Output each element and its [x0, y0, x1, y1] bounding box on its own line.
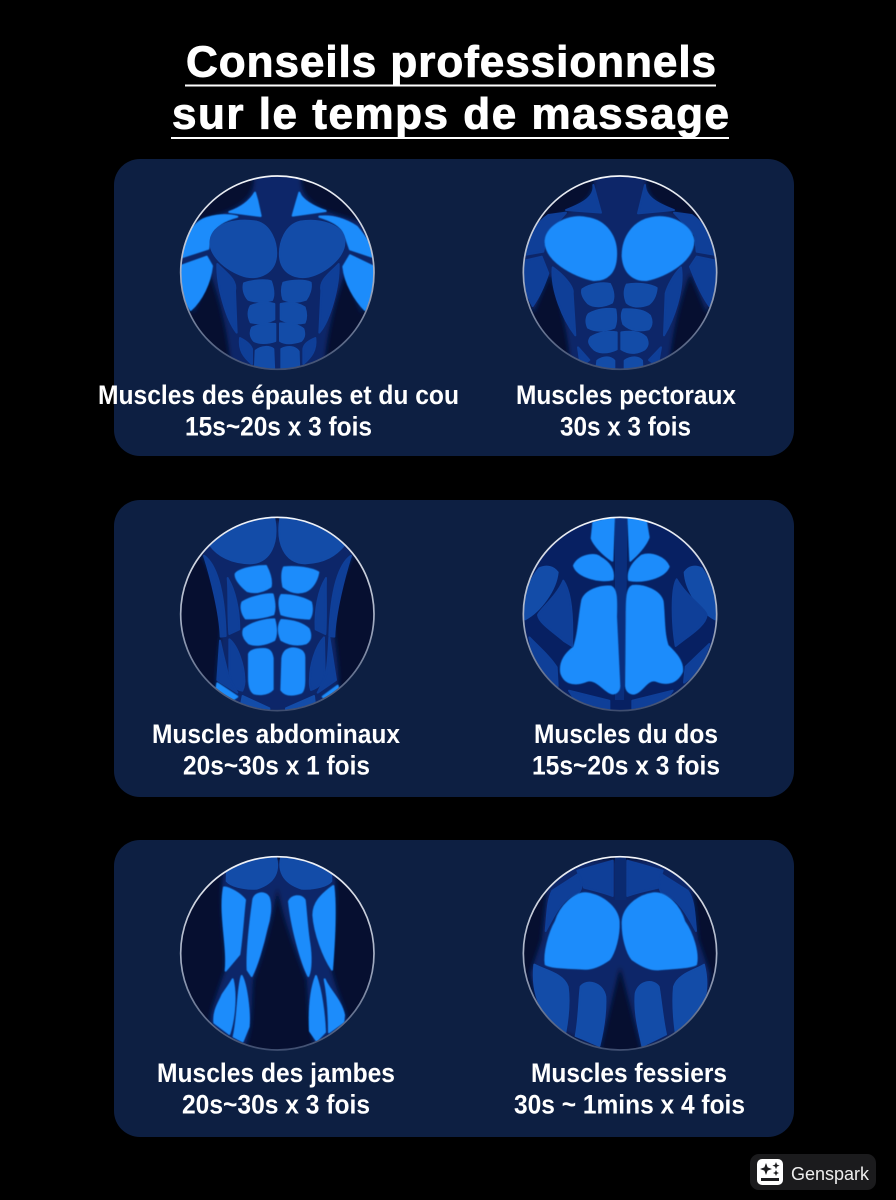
label: pectoral muscles: 30s x 3 fois — [560, 412, 691, 442]
label: leg muscles: Muscles des jambes — [157, 1058, 395, 1088]
icon: Genspark logo — [757, 1159, 783, 1185]
icon: shoulder and neck muscles — [177, 173, 378, 373]
label: pectoral muscles — [516, 380, 736, 442]
label: back muscles — [532, 719, 720, 780]
title — [171, 38, 729, 139]
panel: abdominals and back — [114, 500, 794, 797]
title: sur le temps de massage — [172, 90, 729, 138]
icon: leg muscles — [181, 857, 374, 1050]
label: back muscles: 15s~20s x 3 fois — [532, 750, 720, 780]
label: leg muscles: 20s~30s x 3 fois — [182, 1090, 370, 1120]
label: shoulder and neck muscles: 15s~20s x 3 fois — [185, 412, 372, 442]
label: back muscles: Muscles du dos — [534, 719, 718, 749]
label: gluteal muscles — [514, 1058, 745, 1120]
icon: back muscles — [523, 517, 717, 713]
panel: legs and glutes — [114, 840, 794, 1137]
label: gluteal muscles: 30s ~ 1mins x 4 fois — [514, 1090, 745, 1120]
badge text: Genspark — [791, 1164, 870, 1184]
label: abdominal muscles — [152, 719, 400, 780]
badge: Genspark — [750, 1154, 876, 1190]
icon: abdominal muscles — [181, 517, 374, 713]
icon: pectoral muscles — [517, 173, 723, 373]
panel: shoulders and chest — [98, 159, 794, 456]
label: gluteal muscles: Muscles fessiers — [531, 1058, 727, 1088]
label: pectoral muscles: Muscles pectoraux — [516, 380, 736, 410]
title: Conseils professionnels — [186, 38, 716, 86]
label: shoulder and neck muscles: Muscles des épaules et du cou — [98, 380, 459, 410]
label: leg muscles — [157, 1058, 395, 1120]
label: abdominal muscles: 20s~30s x 1 fois — [183, 750, 370, 780]
label: abdominal muscles: Muscles abdominaux — [152, 719, 400, 749]
icon: gluteal muscles — [523, 857, 717, 1050]
label: shoulder and neck muscles — [98, 380, 459, 442]
